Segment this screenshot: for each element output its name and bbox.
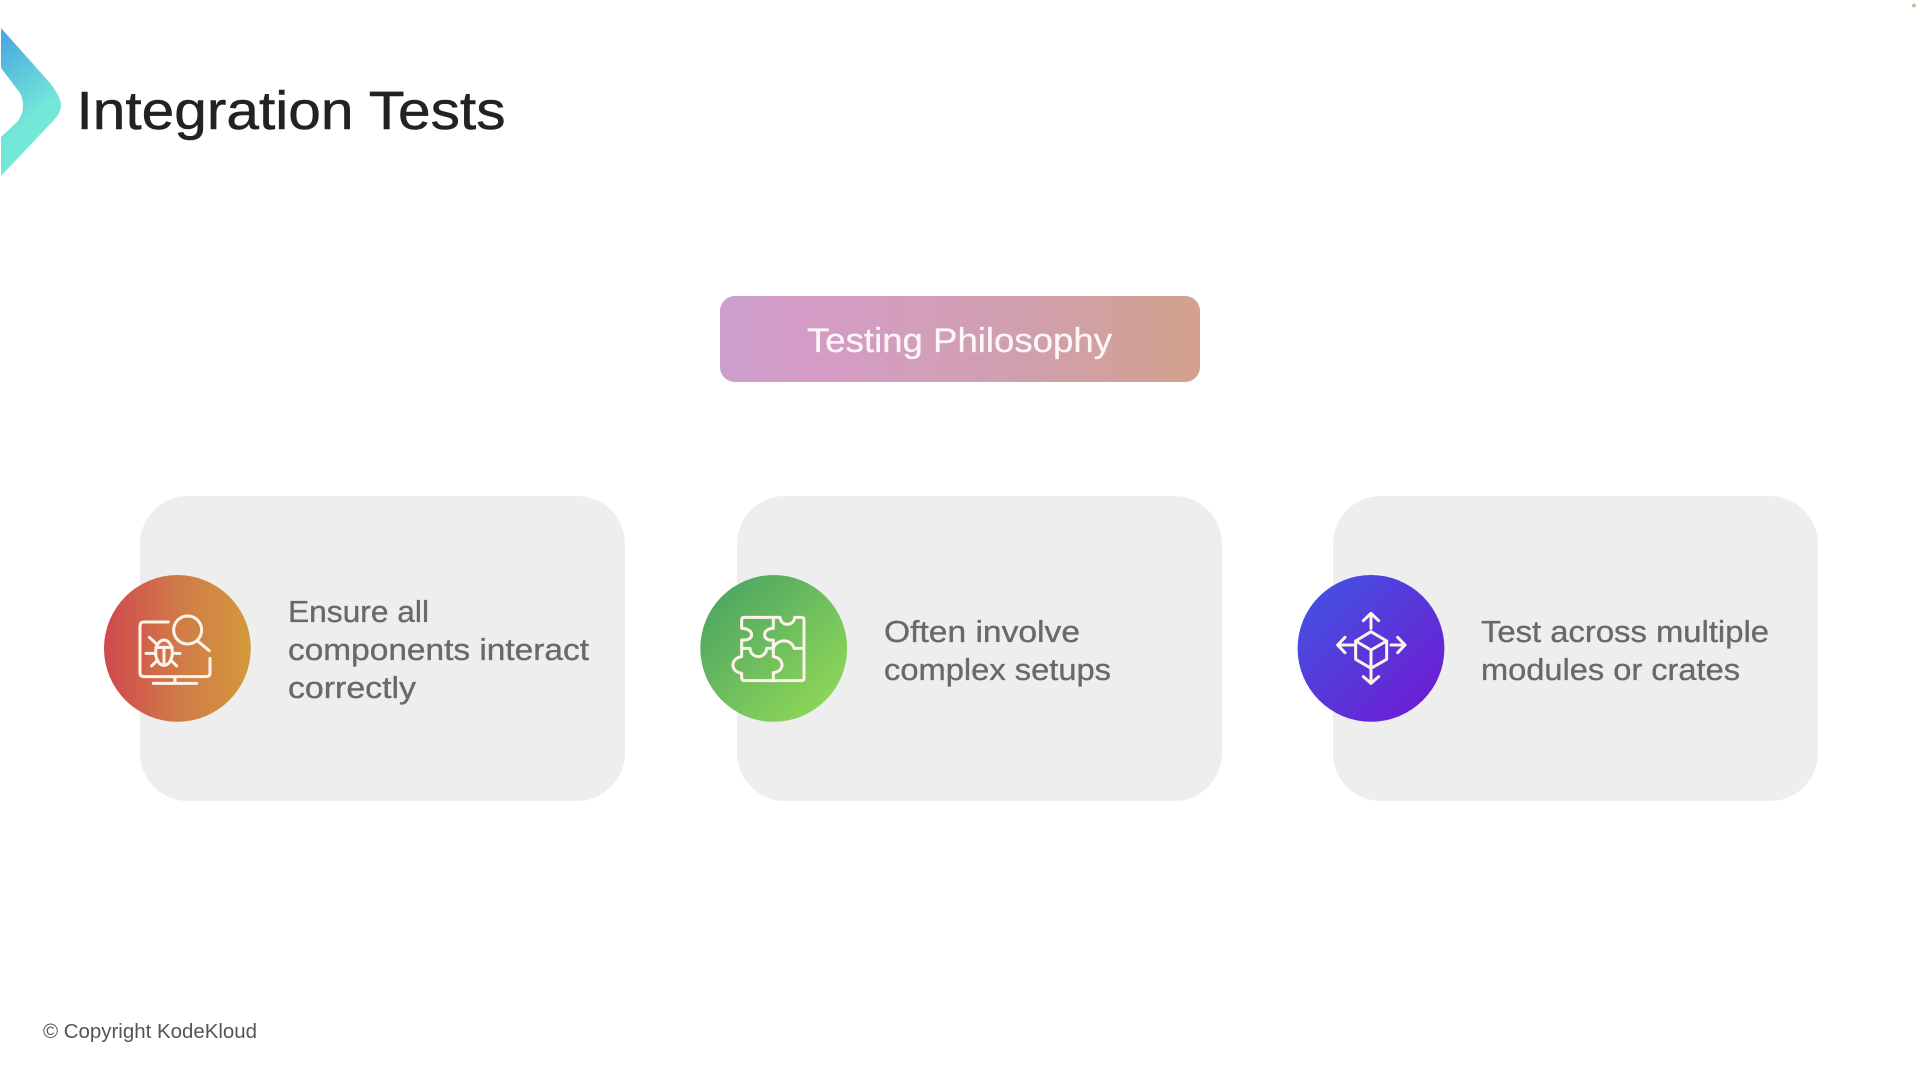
icon: header chevron — [1, 28, 61, 176]
title: Integration Tests — [76, 81, 506, 141]
icon: puzzle pieces — [700, 575, 847, 722]
panel: multiple modules — [1298, 496, 1818, 801]
card text: correctly — [288, 670, 417, 705]
heading pill: Testing Philosophy — [720, 296, 1200, 382]
card text: Often involve — [884, 614, 1080, 649]
card text: components interact — [288, 632, 589, 667]
card text: modules or crates — [1481, 652, 1740, 687]
icon: cube with four arrows — [1298, 575, 1444, 722]
card text: complex setups — [884, 652, 1111, 687]
icon: monitor with bug and magnifier — [104, 575, 251, 722]
corner speck — [1912, 4, 1916, 8]
panel: complex setups — [700, 496, 1222, 801]
panel: ensure components interact — [104, 496, 625, 801]
card text: Ensure all — [288, 594, 429, 629]
card text: Test across multiple — [1481, 614, 1769, 649]
footer copyright: © Copyright KodeKloud — [43, 1021, 257, 1043]
heading pill: Testing Philosophy: Testing Philosophy — [807, 322, 1112, 360]
